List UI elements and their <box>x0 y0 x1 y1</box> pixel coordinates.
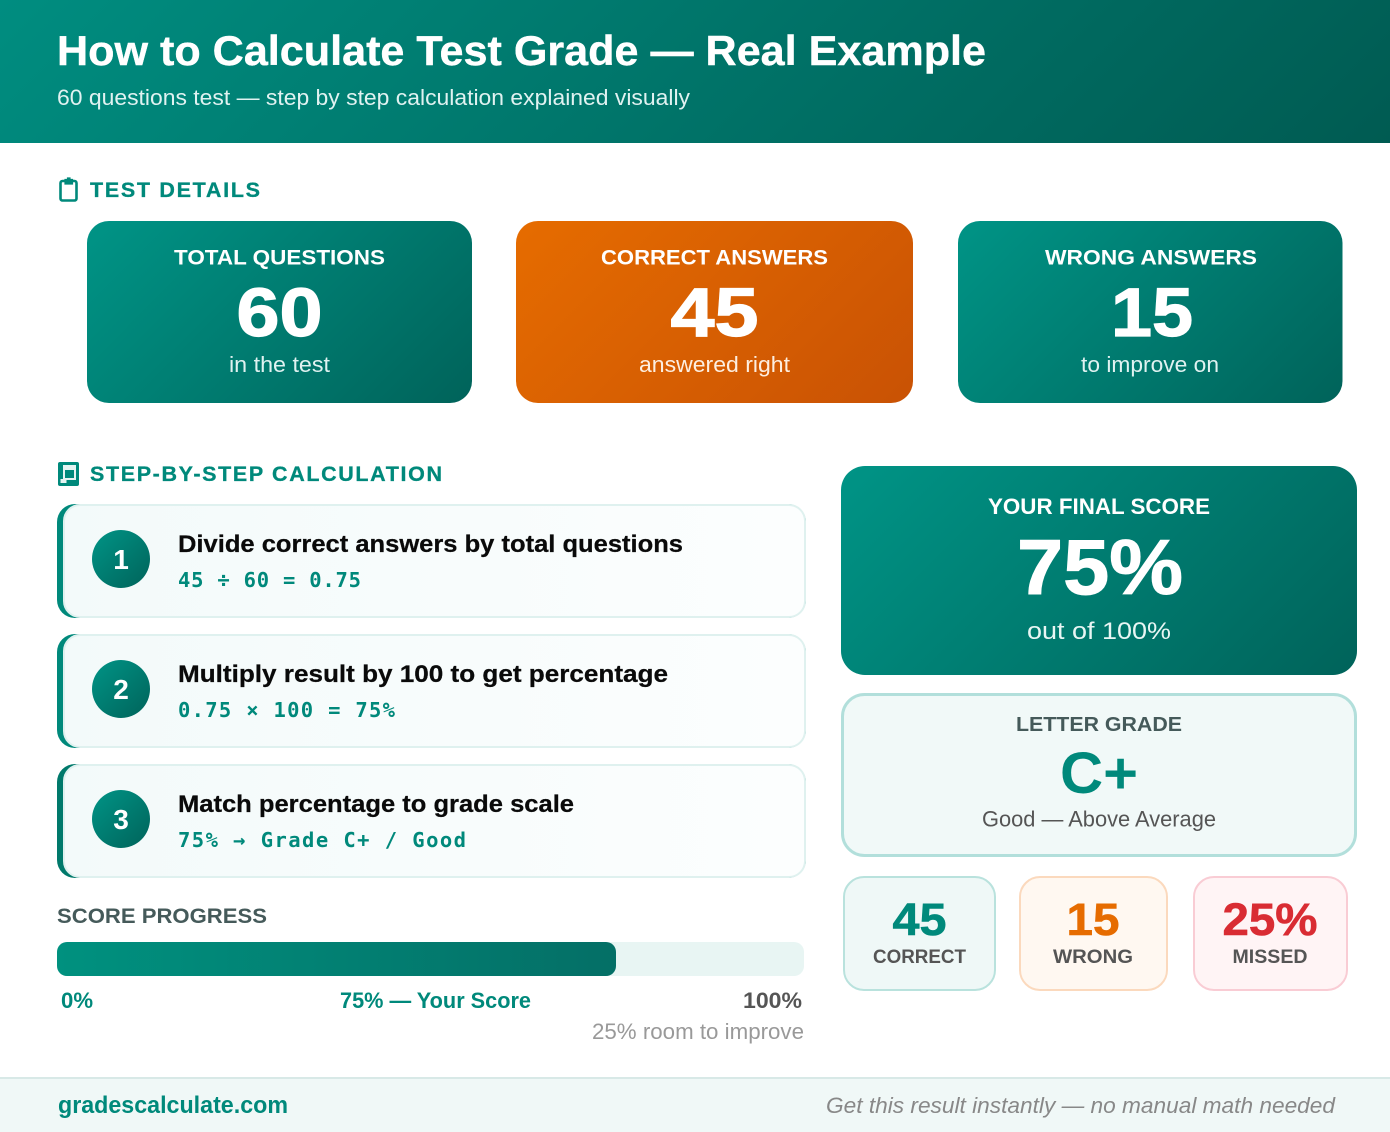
stat card: wrong answers: WRONG ANSWERS <box>1045 246 1257 270</box>
icon: clipboard <box>60 178 76 200</box>
step number badge 3 <box>92 790 150 848</box>
footer: gradescalculate.com <box>58 1092 288 1119</box>
section heading: test details: TEST DETAILS <box>90 178 260 202</box>
step card 2: 0.75 × 100 = 75% <box>178 698 396 722</box>
step number badge 3: 3 <box>113 804 129 835</box>
title: How to Calculate Test Grade — Real Example <box>57 27 986 74</box>
score progress chart: SCORE PROGRESS <box>57 905 267 928</box>
mini stat: correct <box>844 877 995 990</box>
panel: letter grade: C+ <box>1060 741 1138 806</box>
stat card: total questions: in the test <box>229 352 330 377</box>
step card 1: 45 ÷ 60 = 0.75 <box>178 568 361 592</box>
step number badge 2 <box>92 660 150 718</box>
mini stat: correct: 45 <box>892 894 946 945</box>
stat card: correct answers: answered right <box>639 352 790 377</box>
step card 3 <box>57 764 806 878</box>
subtitle: 60 questions test — step by step calculation explained visually <box>57 85 691 110</box>
step number badge 1 <box>92 530 150 588</box>
panel: final score: 75% <box>1017 523 1183 611</box>
panel: final score <box>841 466 1357 675</box>
section heading: step-by-step calculation: STEP-BY-STEP CALCULATION <box>90 462 442 486</box>
mini stat: correct: CORRECT <box>873 946 966 968</box>
panel: final score: YOUR FINAL SCORE <box>988 494 1210 519</box>
panel: letter grade <box>842 694 1356 856</box>
stat card: correct answers: 45 <box>670 274 758 351</box>
step number badge 2: 2 <box>113 674 129 705</box>
mini stat: missed: MISSED <box>1232 946 1308 968</box>
step card 1: Divide correct answers by total questions <box>178 531 683 558</box>
stat card: wrong answers <box>958 221 1342 403</box>
stat card: wrong answers: to improve on <box>1081 352 1219 377</box>
score progress chart: 0% <box>61 988 93 1013</box>
step card 3: Match percentage to grade scale <box>178 791 574 818</box>
panel: letter grade: LETTER GRADE <box>1016 713 1182 736</box>
mini stat: missed <box>1194 877 1347 990</box>
mini stat: wrong <box>1020 877 1167 990</box>
score progress chart: 25% room to improve <box>592 1019 804 1044</box>
step card 1 <box>57 504 806 618</box>
step card 2: Multiply result by 100 to get percentage <box>178 661 668 688</box>
panel: final score: out of 100% <box>1027 618 1171 645</box>
step card 2 <box>57 634 806 748</box>
mini stat: wrong: WRONG <box>1053 946 1133 968</box>
panel: letter grade: Good — Above Average <box>982 806 1216 832</box>
stat card: correct answers <box>516 221 913 403</box>
step number badge 1: 1 <box>113 544 129 575</box>
mini stat: wrong: 15 <box>1066 894 1120 945</box>
stat card: correct answers: CORRECT ANSWERS <box>601 246 828 270</box>
stat card: total questions <box>87 221 472 403</box>
stat card: total questions: TOTAL QUESTIONS <box>174 246 385 270</box>
score progress chart: 100% <box>743 988 802 1013</box>
footer: Get this result instantly — no manual math needed <box>826 1093 1336 1118</box>
header banner <box>0 0 1390 143</box>
score progress chart <box>57 905 804 1044</box>
step card 3: 75% → Grade C+ / Good <box>178 828 466 852</box>
mini stat: missed: 25% <box>1222 894 1318 945</box>
icon: abacus <box>58 462 79 486</box>
score progress chart: 75% — Your Score <box>340 988 531 1013</box>
footer <box>0 1077 1390 1132</box>
stat card: total questions: 60 <box>236 274 322 351</box>
stat card: wrong answers: 15 <box>1111 274 1193 351</box>
